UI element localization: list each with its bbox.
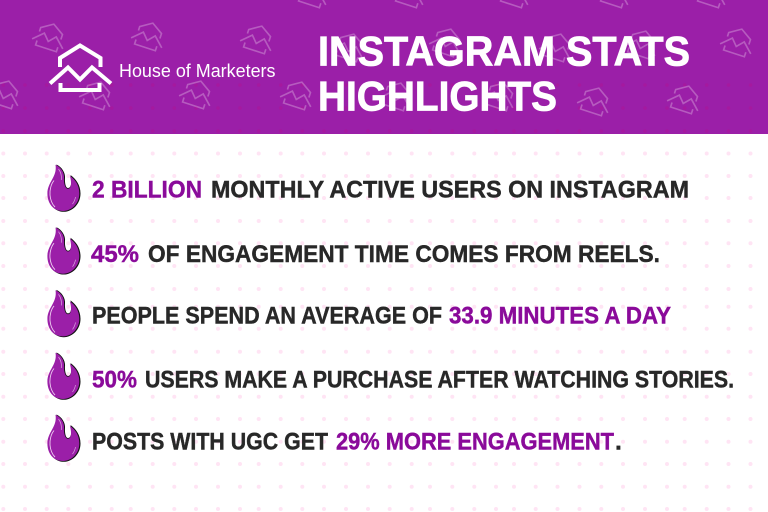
icon: flame — [47, 414, 80, 462]
stat text: PEOPLE SPEND AN AVERAGE OF — [92, 302, 442, 330]
icon: house logo mark — [50, 46, 111, 90]
stat text: OF ENGAGEMENT TIME COMES FROM REELS. — [148, 241, 660, 268]
house watermark pattern — [0, 0, 757, 117]
stat row 3: minutes per day — [47, 290, 671, 337]
stat text: 45% — [91, 241, 139, 268]
stat text: 29% MORE ENGAGEMENT — [336, 428, 614, 455]
stat text: MONTHLY ACTIVE USERS ON INSTAGRAM — [211, 176, 689, 203]
stat text: 2 BILLION — [92, 176, 202, 203]
icon: flame — [47, 164, 80, 212]
stat row 1: monthly active users — [47, 164, 689, 212]
background dot pattern — [3, 154, 751, 509]
panel: header banner — [0, 0, 768, 134]
icon: flame — [47, 227, 80, 274]
title: HIGHLIGHTS — [318, 72, 557, 120]
logo wordmark: House of Marketers — [119, 61, 276, 81]
logo: House of Marketers — [50, 46, 276, 90]
title — [318, 28, 690, 120]
stat text: 33.9 MINUTES A DAY — [449, 302, 671, 330]
stat row 5: UGC engagement — [47, 414, 622, 462]
stat text: . — [615, 428, 622, 455]
title: INSTAGRAM STATS — [318, 28, 690, 74]
icon: flame — [47, 352, 80, 400]
stat text: POSTS WITH UGC GET — [92, 428, 328, 455]
stat row 2: reels engagement — [47, 227, 660, 274]
stat row 4: purchases after stories — [47, 352, 734, 400]
stat text: 50% — [92, 367, 137, 394]
icon: flame — [47, 290, 80, 337]
